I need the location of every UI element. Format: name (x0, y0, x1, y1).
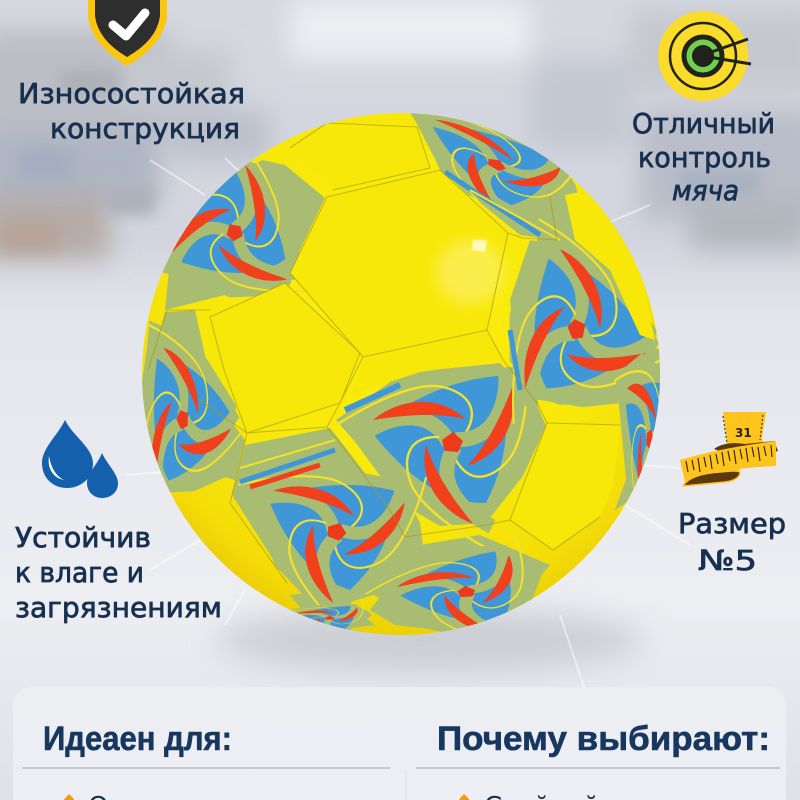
caption: wear-resistant (18, 77, 245, 145)
caption: moisture resistant: Устойчив (15, 521, 151, 554)
heading: why choose: Почему выбирают: (437, 720, 770, 758)
light rays (125, 158, 690, 690)
icon: measuring tape (680, 412, 778, 486)
panel seams (148, 123, 620, 583)
swirl: lower left (238, 473, 428, 628)
caption: ball control: контроль (638, 141, 771, 174)
caption: size: Размер (678, 507, 786, 540)
caption: size: №5 (698, 544, 757, 577)
icon: shield (88, 0, 167, 66)
icon: measuring tape: 31 (735, 426, 752, 440)
caption: size (678, 507, 786, 577)
swirl: far right (614, 354, 660, 496)
swirl: bottom left sliver (290, 601, 372, 630)
caption: wear-resistant: конструкция (50, 112, 240, 145)
swirl: bottom (365, 534, 542, 632)
swirl: top right (410, 113, 578, 232)
bullet: right (455, 794, 472, 800)
bullet: left (60, 794, 77, 800)
caption: ball control: Отличный (632, 107, 775, 140)
caption: moisture resistant (15, 521, 222, 624)
glare (472, 240, 487, 252)
swirl: far left (142, 320, 245, 492)
caption: ball control (632, 107, 775, 207)
swirl: main centre (334, 363, 546, 546)
stripes on bands (240, 172, 560, 487)
caption: moisture resistant: к влаге и (15, 556, 144, 589)
heading: ideal for: Идеаен для: (43, 720, 232, 758)
icon: target (658, 11, 751, 101)
swirl: right (510, 218, 660, 424)
yellow patches over swirls (210, 123, 655, 550)
caption: wear-resistant: Износостойкая (18, 77, 245, 110)
soccer ball (142, 113, 660, 635)
swirl: upper left (162, 158, 306, 298)
icon: water drops (42, 420, 118, 498)
caption: moisture resistant: загрязнениям (15, 591, 222, 624)
caption: ball control: мяча (672, 174, 739, 207)
ball shadow (215, 608, 645, 672)
surface highlight (436, 240, 504, 304)
lower shade (174, 499, 302, 614)
swirl backing bands (145, 120, 662, 632)
dividers (22, 767, 780, 769)
ball base (142, 113, 660, 635)
panel: ideal for / why choose (13, 687, 786, 800)
